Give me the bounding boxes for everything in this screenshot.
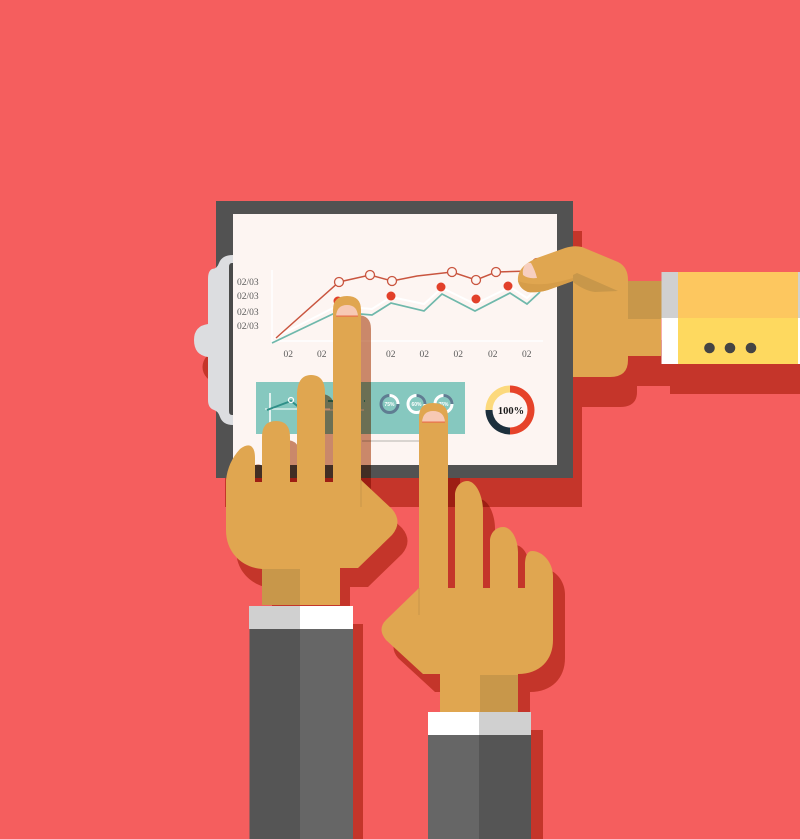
y axis labels (237, 278, 259, 332)
tablet screen (233, 214, 557, 465)
tablet (194, 201, 573, 478)
white trend line (274, 286, 540, 338)
x axis labels: 02 (420, 350, 429, 360)
right wrist shade (628, 281, 662, 319)
lower right hand (382, 403, 553, 839)
tablet clip (194, 255, 233, 425)
left hand thumb slit (360, 480, 362, 507)
x axis labels: 02 (454, 350, 463, 360)
small donut 75% second (435, 396, 452, 412)
upper left hand shadow (236, 315, 408, 839)
lower hand wrist shade (480, 675, 518, 712)
teal trend line (272, 292, 540, 343)
red trend line (276, 271, 530, 338)
panel caption (362, 440, 420, 442)
x axis labels: 02 (284, 350, 293, 360)
large donut chart (486, 386, 534, 434)
x axis labels: 02 (317, 350, 327, 360)
finger crease (573, 273, 618, 292)
left hand palm and fingers (226, 296, 398, 605)
left cuff (249, 606, 353, 629)
y axis labels: 02/03 (237, 322, 259, 332)
right hand shape (518, 246, 661, 377)
y axis labels: 02/03 (237, 278, 259, 288)
left sleeve (250, 629, 353, 839)
tablet frame (216, 201, 573, 478)
lower hand thumb slit (418, 588, 420, 615)
lower hand fingernail (422, 411, 445, 423)
left hand fingernail (336, 305, 358, 317)
x axis labels: 02 (522, 350, 532, 360)
y axis labels: 02/03 (237, 292, 259, 302)
lower right hand shadow (394, 478, 565, 839)
red line markers (334, 258, 542, 286)
mini chart (265, 393, 365, 433)
tablet and right arm shadow (202, 231, 800, 507)
chart axes (272, 270, 543, 343)
lower sleeve (428, 735, 531, 839)
sleeve buttons (704, 343, 756, 353)
left hand wrist shade (262, 569, 300, 605)
small donut 60% (408, 396, 425, 412)
large donut chart: 100% (498, 406, 524, 417)
right hand with yellow sleeve (518, 246, 800, 377)
small donut 60%: 60% (411, 402, 422, 408)
yellow sleeve (678, 272, 800, 364)
right cuff (662, 272, 678, 364)
x axis labels: 02 (488, 350, 498, 360)
x axis labels: 02 (352, 350, 362, 360)
finger underside shade (518, 278, 573, 292)
lower hand palm and fingers (382, 403, 553, 712)
right hand fingernail (523, 263, 537, 278)
line chart (237, 258, 543, 360)
lower cuff (428, 712, 531, 735)
small donut 75% second: 75% (438, 402, 449, 408)
small donut 75%: 75% (384, 402, 395, 408)
teal stats panel (256, 382, 465, 442)
y axis labels: 02/03 (237, 308, 259, 318)
upper left hand (226, 296, 398, 839)
small donut 75% (381, 396, 398, 412)
x axis labels: 02 (386, 350, 396, 360)
x axis labels (284, 350, 532, 360)
red dots (334, 282, 512, 306)
